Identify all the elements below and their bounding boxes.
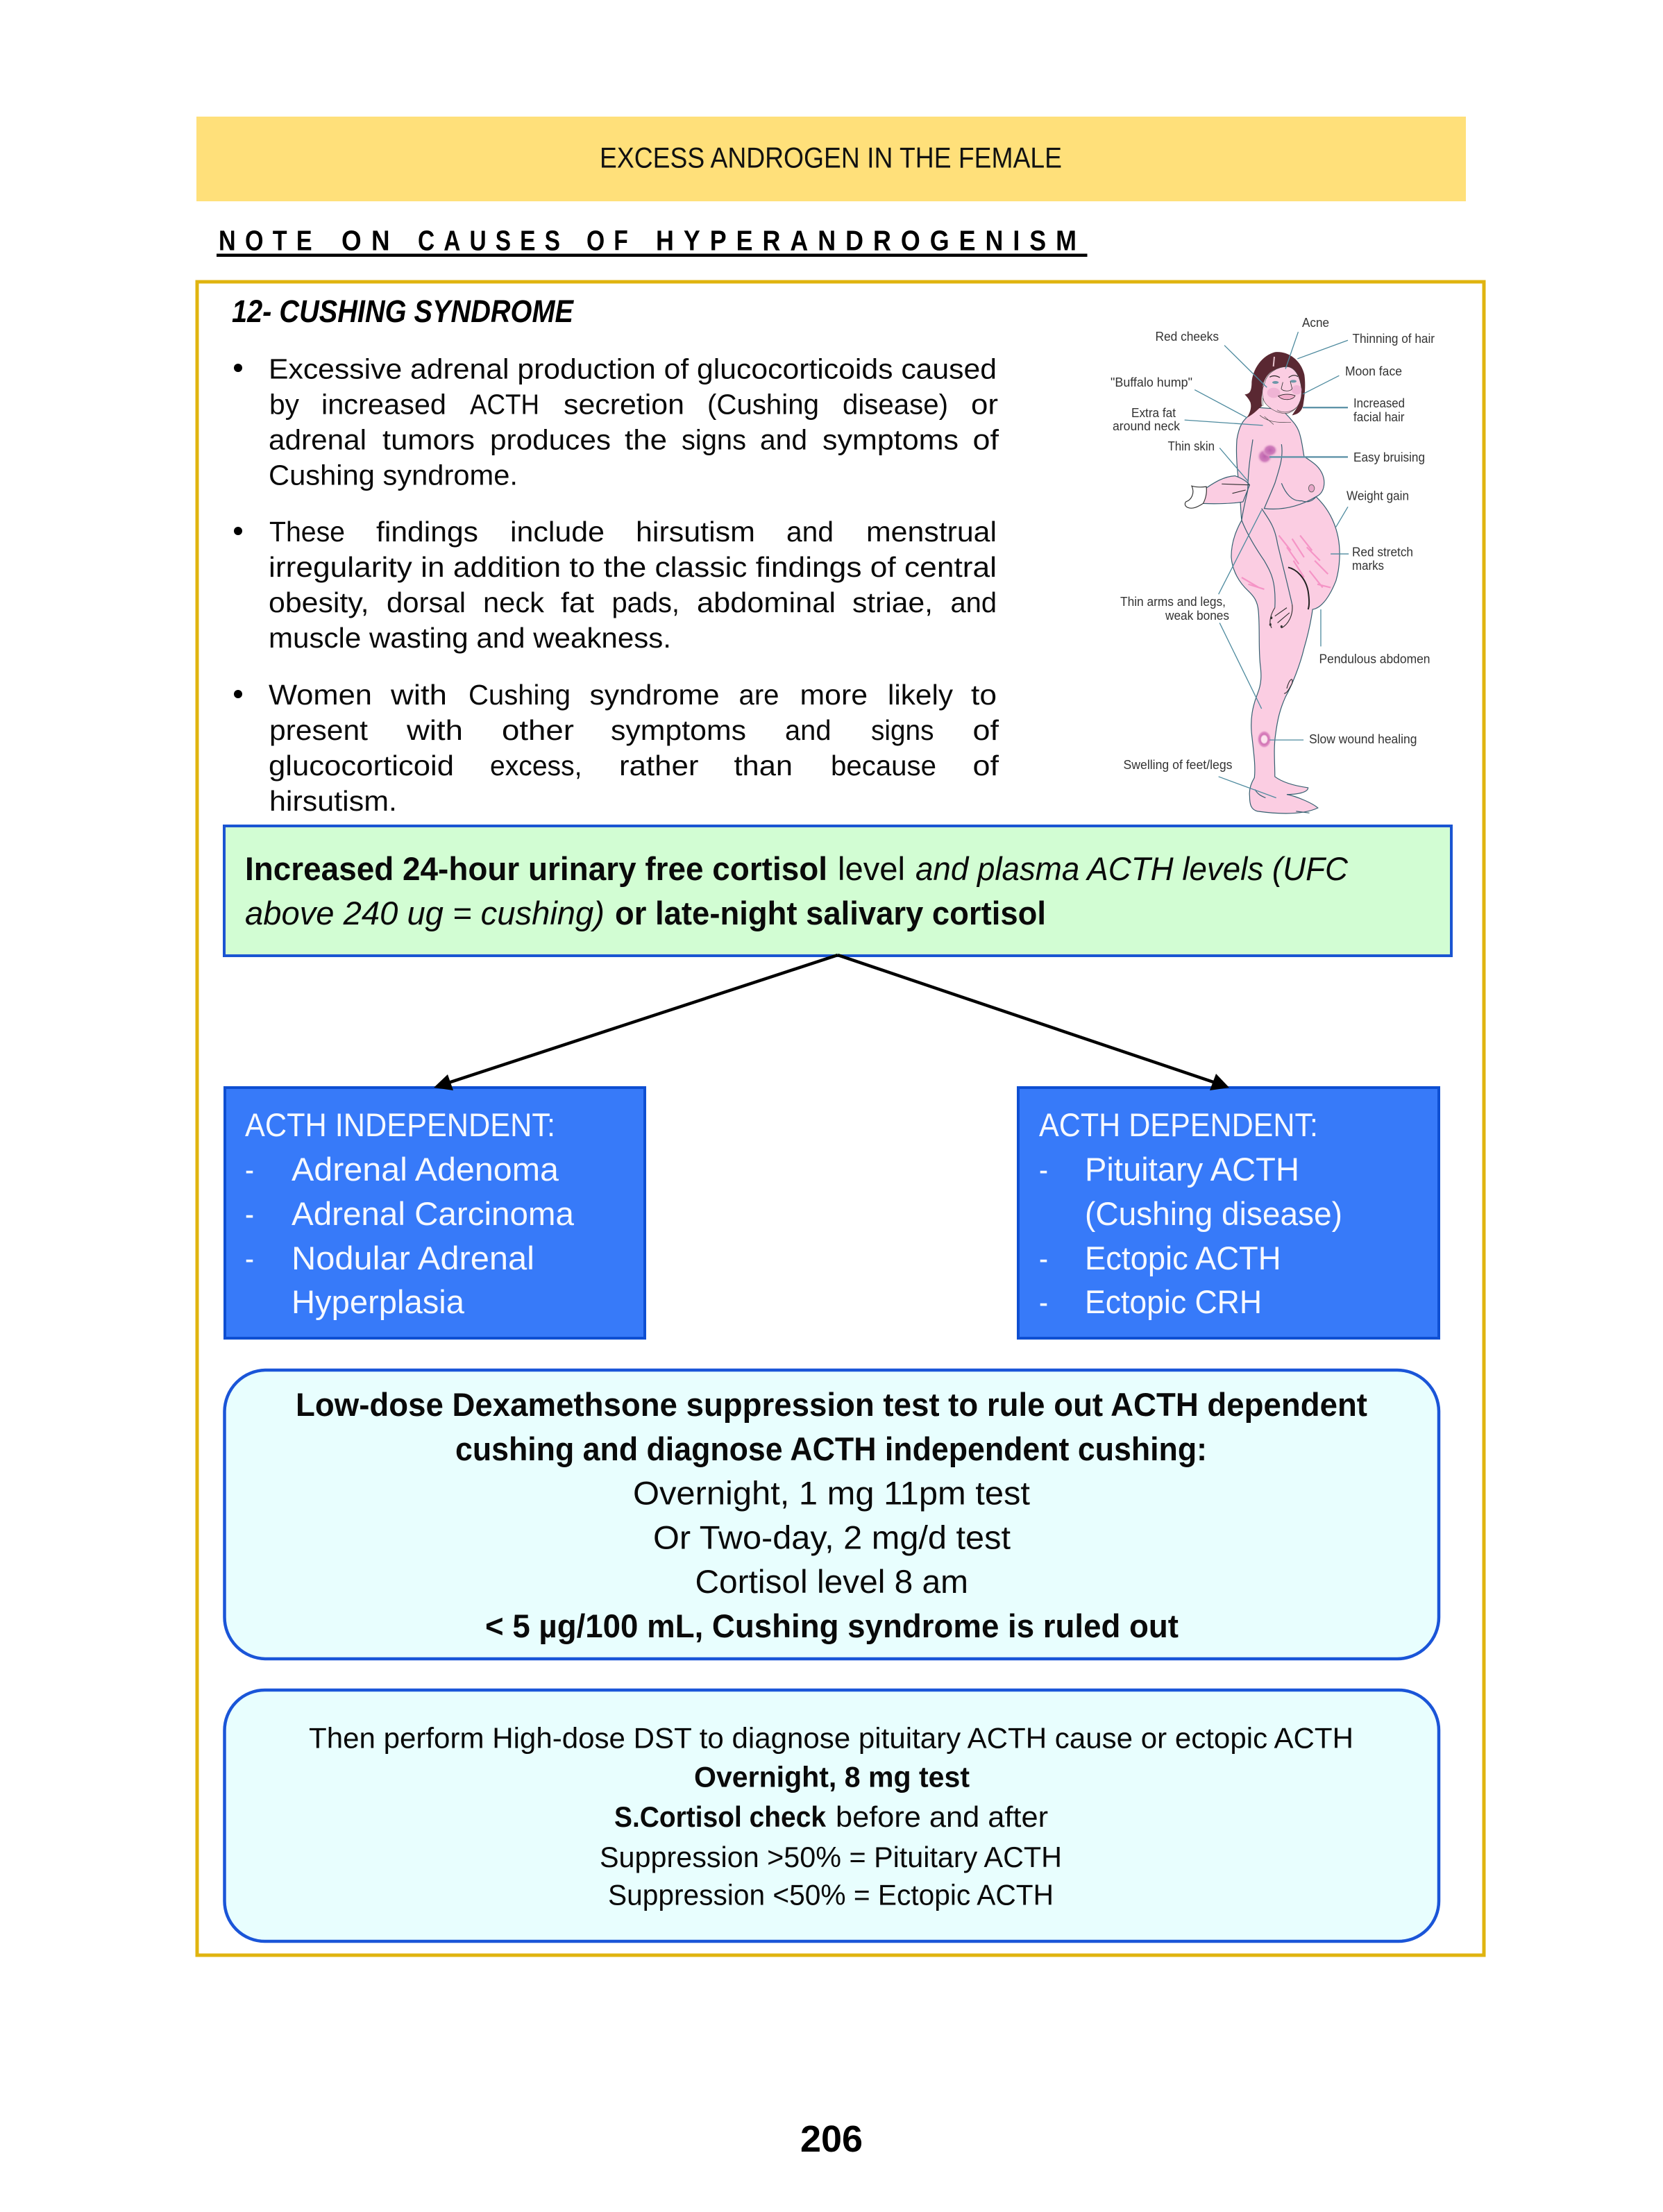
panel: urinary free cortisol test: and plasma ACTH levels (UFC [915, 850, 1349, 887]
hand on thigh [1270, 605, 1292, 628]
bullet text 2: findings [376, 516, 478, 548]
bullet text 3: likely [888, 679, 954, 711]
bullet text 3 [234, 679, 999, 817]
panel: cushing syndrome frame [197, 282, 1484, 1955]
bullet text 3: than [734, 750, 793, 782]
figure labels: around neck [1113, 419, 1181, 433]
panel: urinary free cortisol test: Increased 24-hour urinary free cortisol [245, 850, 827, 887]
bullet text 1: and [760, 423, 807, 455]
bullet text 3: hirsutism. [269, 785, 397, 817]
bullet text 1: (Cushing [707, 389, 819, 421]
bullet text 1: adrenal [269, 423, 366, 455]
panel: ACTH independent: Adrenal Adenoma [292, 1151, 559, 1188]
bullet text 3: other [502, 714, 574, 746]
bullet text 3: are [738, 679, 779, 711]
panel: ACTH dependent: Ectopic CRH [1085, 1283, 1262, 1320]
bullet text 2: irregularity in addition to the classic findings of central [269, 551, 997, 583]
bruise [1257, 444, 1278, 464]
figure labels: Swelling of feet/legs [1123, 758, 1233, 772]
panel: high-dose DST: Suppression <50% = Ectopic ACTH [608, 1878, 1054, 1911]
bullet text 1: ACTH [470, 389, 539, 421]
panel: ACTH dependent: Ectopic ACTH [1085, 1240, 1281, 1276]
figure labels: Acne [1302, 316, 1329, 330]
bullet text 2: dorsal [387, 586, 466, 618]
bullet text 1: of [973, 423, 999, 455]
bullet text 3: with [390, 679, 447, 711]
panel: ACTH independent: Adrenal Carcinoma [292, 1195, 575, 1232]
bullet text 3: glucocorticoid [269, 750, 454, 782]
bullet text 2: pads, [612, 586, 679, 618]
bullet text 1: Cushing syndrome. [269, 459, 518, 491]
section heading: note on causes: OF [586, 225, 637, 257]
bullet text 2: and [786, 516, 834, 548]
panel: ACTH independent: Hyperplasia [292, 1283, 465, 1320]
bullet text 2: These [269, 516, 345, 548]
panel: high-dose DST [225, 1690, 1439, 1941]
wound [1257, 730, 1272, 748]
bullet text 1: disease) [843, 389, 948, 421]
bullet text 2: striae, [852, 586, 933, 618]
panel: ACTH dependent: Pituitary ACTH [1085, 1151, 1299, 1188]
bullet text 1: signs [682, 423, 746, 455]
figure labels: Weight gain [1347, 489, 1409, 503]
bullet text 2 [234, 516, 997, 654]
bullet text 1: symptoms [822, 423, 959, 455]
figure drawing: head [1244, 352, 1305, 425]
arrow: to ACTH dependent [838, 955, 1229, 1090]
bullet text 3: Cushing [468, 679, 571, 711]
panel: ACTH dependent: - [1039, 1283, 1048, 1320]
bullet text 1: Excessive adrenal production of glucocorticoids caused [269, 353, 997, 385]
bullet text 2: abdominal [697, 586, 836, 618]
figure drawing: body [1185, 407, 1340, 813]
panel: urinary free cortisol test: or late-night salivary cortisol [615, 895, 1046, 931]
bullet text 2: menstrual [866, 516, 997, 548]
figure labels: weak bones [1165, 609, 1229, 623]
panel: high-dose DST: Then perform High-dose DST to diagnose pituitary ACTH cause or ectopic ACTH [309, 1721, 1353, 1755]
figure labels: "Buffalo hump" [1111, 375, 1192, 389]
figure labels: Red cheeks [1155, 330, 1219, 344]
bullet text 2: muscle wasting and weakness. [269, 622, 671, 654]
bullet text 2: include [510, 516, 605, 548]
subheading: 12- cushing syndrome: 12- CUSHING SYNDROME [232, 294, 575, 329]
bullet text 3: to [971, 679, 997, 711]
panel: ACTH dependent [1018, 1088, 1439, 1338]
panel: low-dose dexamethasone test [225, 1370, 1439, 1659]
panel: low-dose dexamethasone test: Low-dose Dexamethsone suppression test to rule out ACTH dependent [296, 1386, 1367, 1423]
page number: 206 [800, 2118, 863, 2160]
header band [196, 117, 1466, 201]
bullet text 3: syndrome [590, 679, 719, 711]
panel: urinary free cortisol test: level [838, 850, 905, 887]
figure labels: Thin arms and legs, [1120, 595, 1226, 609]
section heading: note on causes [217, 225, 1087, 257]
illustration: cushing syndrome body with labels [1111, 316, 1435, 813]
panel: ACTH independent: - [245, 1151, 254, 1188]
bullet text 1: increased [321, 389, 446, 421]
arrow: to ACTH independent [434, 955, 838, 1090]
figure labels: facial hair [1353, 410, 1405, 424]
panel: low-dose dexamethasone test: Cortisol level 8 am [695, 1563, 968, 1600]
figure labels: Thin skin [1167, 439, 1215, 453]
panel: high-dose DST: Suppression >50% = Pituitary ACTH [600, 1841, 1062, 1873]
bullet text 3: symptoms [611, 714, 746, 746]
bullet text 3: excess, [490, 750, 582, 782]
bullet text 2: neck [483, 586, 545, 618]
bullet text 1: secretion [564, 389, 684, 421]
section heading: note on causes: CAUSES [418, 225, 569, 257]
figure labels: marks [1352, 559, 1384, 573]
panel: ACTH dependent: - [1039, 1240, 1048, 1276]
bullet text 1 [234, 353, 999, 491]
bullet text 2: hirsutism [636, 516, 755, 548]
figure labels: Extra fat [1131, 406, 1176, 420]
figure labels: Thinning of hair [1352, 332, 1435, 346]
panel: ACTH dependent: (Cushing disease) [1085, 1195, 1342, 1232]
bullet text 2: and [951, 586, 997, 618]
bullet text 3: present [269, 714, 369, 746]
bullet text 3: signs [871, 714, 934, 746]
panel: low-dose dexamethasone test: < 5 µg/100 mL, Cushing syndrome is ruled out [485, 1607, 1179, 1644]
bullet text 3: rather [619, 750, 698, 782]
bullet text 1: tumors [382, 423, 475, 455]
panel: low-dose dexamethasone test: Or Two-day, 2 mg/d test [653, 1519, 1011, 1556]
bullet text 3: because [831, 750, 936, 782]
bullet text 3: more [800, 679, 868, 711]
panel: ACTH independent: ACTH INDEPENDENT: [245, 1106, 555, 1143]
bullet text 3: Women [269, 679, 372, 711]
section heading: note on causes: HYPERANDROGENISM [656, 225, 1086, 257]
figure labels: Slow wound healing [1309, 732, 1417, 746]
section heading: note on causes: ON [341, 225, 400, 257]
figure labels: Easy bruising [1353, 450, 1425, 464]
panel: high-dose DST: before and after [836, 1800, 1048, 1833]
bullet text 1: or [971, 389, 998, 421]
panel: urinary free cortisol test [224, 826, 1451, 956]
bullet text 3: with [406, 714, 463, 746]
bullet text 3: of [973, 750, 999, 782]
panel: low-dose dexamethasone test: cushing and diagnose ACTH independent cushing: [455, 1430, 1207, 1467]
panel: urinary free cortisol test: above 240 ug = cushing) [245, 895, 605, 931]
bullet text 2: obesity, [269, 586, 369, 618]
bullet text 3: and [785, 714, 832, 746]
figure labels: Increased [1353, 396, 1405, 410]
belly fold [1288, 567, 1309, 609]
panel: ACTH dependent: ACTH DEPENDENT: [1039, 1106, 1318, 1143]
panel: ACTH dependent: - [1039, 1151, 1048, 1188]
stretch marks [1242, 535, 1331, 589]
panel: ACTH independent: Nodular Adrenal [292, 1240, 534, 1276]
bullet text 1: produces [490, 423, 611, 455]
figure labels [1111, 316, 1435, 772]
panel: ACTH independent: - [245, 1195, 254, 1232]
hand and cuff [1203, 476, 1249, 504]
bullet text 1: by [269, 389, 299, 421]
bullet text 2: fat [561, 586, 595, 618]
panel: low-dose dexamethasone test: Overnight, 1 mg 11pm test [633, 1474, 1030, 1512]
panel: high-dose DST: S.Cortisol check [614, 1800, 827, 1833]
leader lines [1185, 332, 1349, 797]
figure labels: Moon face [1345, 364, 1402, 378]
bullet text 1: the [625, 423, 667, 455]
bullet text 3: of [973, 714, 999, 746]
section heading: note on causes: NOTE [219, 225, 321, 257]
body contour lines [1242, 439, 1316, 608]
figure labels: Pendulous abdomen [1319, 652, 1430, 666]
header title: EXCESS ANDROGEN IN THE FEMALE [600, 142, 1062, 174]
figure labels: Red stretch [1352, 546, 1413, 559]
panel: high-dose DST: Overnight, 8 mg test [694, 1760, 970, 1793]
panel: ACTH independent [225, 1088, 645, 1338]
panel: ACTH independent: - [245, 1240, 254, 1276]
